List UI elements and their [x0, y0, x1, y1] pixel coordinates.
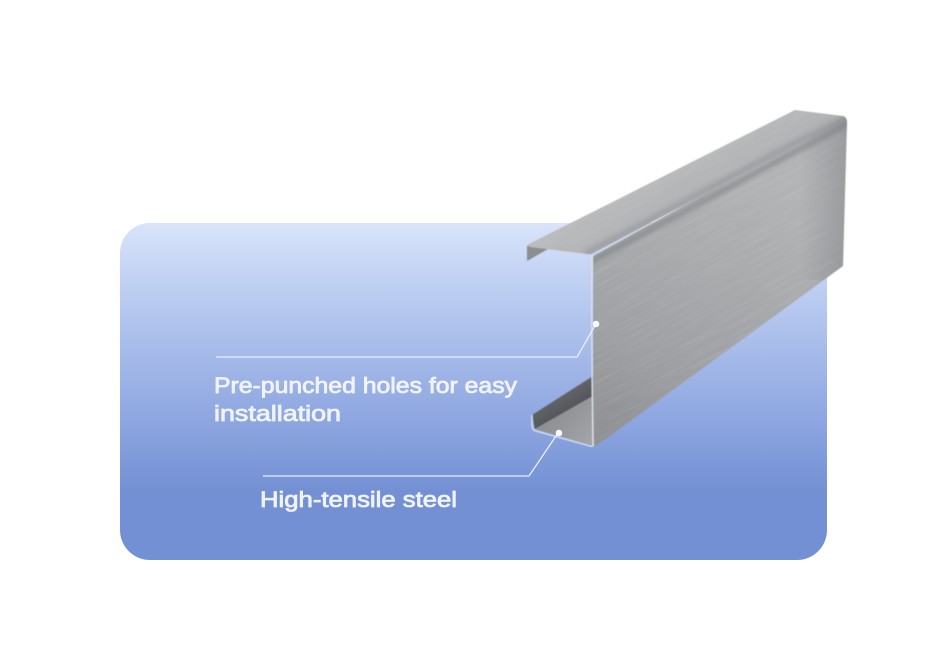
callout: high-tensile steel — [260, 430, 562, 512]
web face — [593, 118, 847, 446]
callout: pre-punched holes — [214, 321, 599, 398]
top flange — [527, 110, 846, 254]
label text: High-tensile steel — [260, 487, 457, 512]
flange bend shadow — [585, 114, 850, 254]
lower flange inner wall — [532, 376, 593, 429]
steel C-channel product image — [526, 110, 848, 448]
top flange lip — [527, 246, 548, 261]
marker dot — [556, 430, 562, 436]
steel edge highlight — [532, 255, 593, 446]
right edge shading — [814, 118, 847, 280]
panel: blue gradient background — [120, 223, 827, 560]
leader line — [263, 433, 558, 476]
leader line — [216, 324, 596, 357]
callout label: second line: installation — [214, 401, 341, 426]
marker dot — [593, 321, 599, 327]
label text: Pre-punched holes for easy — [214, 373, 518, 398]
lower flange floor — [535, 396, 594, 446]
brushed metal texture — [593, 118, 848, 380]
bend shadow — [590, 122, 850, 262]
